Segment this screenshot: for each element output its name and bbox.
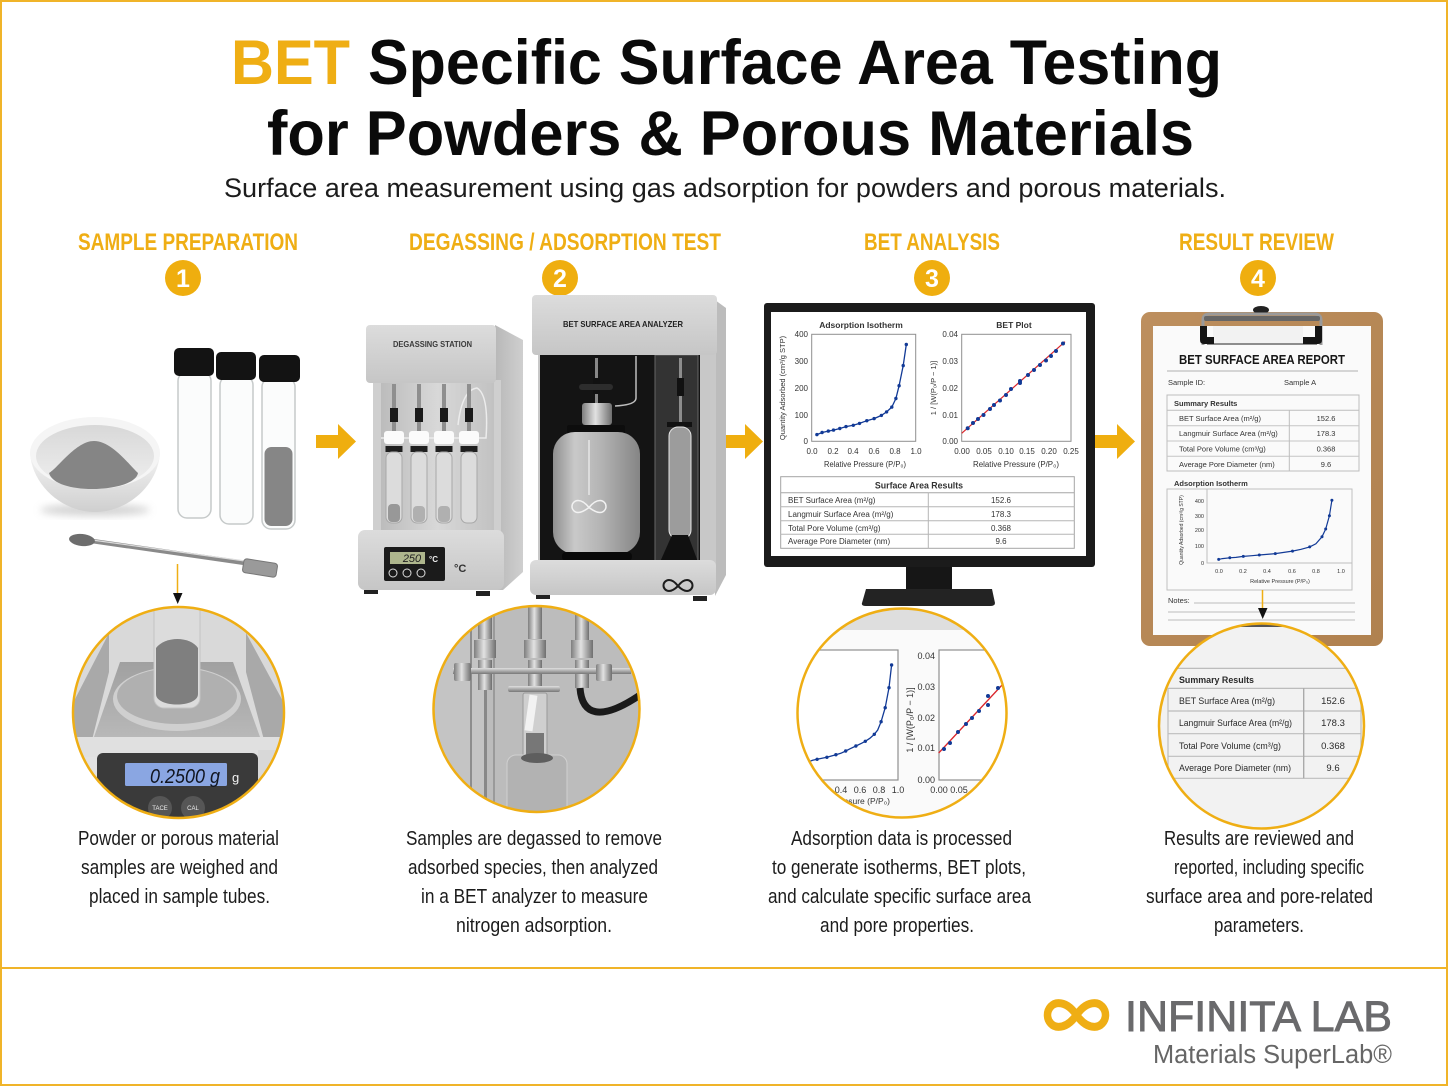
chart: bet plot: BET Plot <box>996 320 1032 330</box>
description step 3: and pore properties. <box>820 915 974 937</box>
chart: bet plot: 0.03 <box>942 357 959 366</box>
summary results table: 0.368 <box>1317 444 1335 454</box>
close-up: balance weighing: 0.2500 g <box>150 766 220 788</box>
title: for Powders & Porous Materials <box>267 99 1194 169</box>
chart: adsorption isotherm <box>778 320 922 469</box>
summary results table <box>1167 395 1359 471</box>
heading: result review: RESULT REVIEW <box>1179 229 1334 256</box>
subtitle: Surface area measurement using gas adsorption for powders and porous materials. <box>224 173 1226 203</box>
title: BET <box>231 28 350 98</box>
panel: step 3 bet analysis <box>764 229 1095 937</box>
chart: bet plot: 0.25 <box>1063 447 1079 456</box>
close-up: summary results: 178.3 <box>1321 718 1345 729</box>
title: Specific Surface Area Testing <box>368 28 1222 98</box>
close-up: summary results: Average Pore Diameter (nm) <box>1179 763 1291 774</box>
table: surface area results: 9.6 <box>995 537 1007 546</box>
chart: bet plot: Relative Pressure (P/P₀) <box>973 460 1059 469</box>
summary results table: 152.6 <box>1317 414 1335 423</box>
heading: sample preparation: SAMPLE PREPARATION <box>78 229 298 256</box>
clipboard report: Sample ID: <box>1168 378 1205 387</box>
close-up: plots detail: 0.4 <box>835 785 847 795</box>
heading: bet analysis: BET ANALYSIS <box>864 229 1000 256</box>
summary results table: Summary Results <box>1174 399 1237 408</box>
summary results table: Langmuir Surface Area (m²/g) <box>1179 429 1278 438</box>
chart: adsorption isotherm: 0.6 <box>868 447 880 456</box>
chart: bet plot <box>929 320 1079 469</box>
close-up: plots detail: 0.00 <box>930 785 948 795</box>
chart: adsorption isotherm: Relative Pressure (P/P₀) <box>824 460 906 469</box>
monitor <box>764 303 1095 606</box>
arrow to report close-up <box>1258 590 1268 619</box>
description step 4: surface area and pore-related <box>1146 886 1373 908</box>
close-up: plots detail: 0.04 <box>917 651 935 661</box>
step number 2 <box>542 260 578 296</box>
icon: infinity <box>1048 1003 1106 1027</box>
clipboard report <box>1141 306 1383 646</box>
table: surface area results: 0.368 <box>991 524 1012 533</box>
chart: bet plot: 0.04 <box>942 330 959 339</box>
close-up: plots detail: 0.01 <box>917 743 935 753</box>
table: surface area results: BET Surface Area (m²/g) <box>788 496 876 505</box>
description step 3: to generate isotherms, BET plots, <box>772 857 1026 879</box>
report isotherm chart: Adsorption Isotherm <box>1174 479 1248 488</box>
description step 4: Results are reviewed and <box>1164 828 1354 850</box>
description step 3 <box>768 828 1032 937</box>
report isotherm chart: 1.0 <box>1337 569 1345 575</box>
close-up: plots detail: 0.03 <box>917 682 935 692</box>
icon: sample tubes <box>174 348 300 529</box>
sample cell <box>660 358 698 562</box>
close-up: summary results: 0.368 <box>1321 741 1345 752</box>
report isotherm chart: 300 <box>1195 514 1204 520</box>
table: surface area results: Total Pore Volume (cm³/g) <box>788 524 881 533</box>
report isotherm chart: 100 <box>1195 544 1204 550</box>
panel: step 4 result review <box>1141 229 1383 937</box>
chart: adsorption isotherm: 0 <box>804 437 809 446</box>
description step 3: and calculate specific surface area <box>768 886 1032 908</box>
description step 4 <box>1146 828 1373 937</box>
summary results table: BET Surface Area (m²/g) <box>1179 414 1261 423</box>
bet analyzer instrument <box>530 295 726 601</box>
wordmark: INFINITA LAB <box>1125 993 1392 1041</box>
notes lines: Notes: <box>1168 596 1190 605</box>
panel: step 1 sample preparation <box>30 229 300 908</box>
chart: adsorption isotherm: 0.0 <box>806 447 818 456</box>
table: surface area results: Average Pore Diameter (nm) <box>788 537 890 546</box>
chart: adsorption isotherm: Quantity Adsorbed (cm³/g STP) <box>778 335 787 440</box>
degassing station instrument <box>358 325 523 596</box>
clipboard report: BET SURFACE AREA REPORT <box>1179 352 1345 367</box>
close-up: plots detail: 1.0 <box>892 785 904 795</box>
close-up: balance weighing: TACE <box>152 806 168 812</box>
report isotherm chart: 0.2 <box>1239 569 1247 575</box>
step number 4 <box>1240 260 1276 296</box>
close-up: summary results: Total Pore Volume (cm³/g) <box>1179 741 1281 752</box>
close-up: summary results <box>1159 622 1368 828</box>
temperature display: °C <box>429 555 438 564</box>
chart: adsorption isotherm: 300 <box>795 357 809 366</box>
close-up: summary results: 152.6 <box>1321 696 1345 707</box>
report isotherm chart: 200 <box>1195 528 1204 534</box>
chart: adsorption isotherm: 100 <box>795 411 809 420</box>
clipboard report: Sample A <box>1284 378 1316 387</box>
bet analyzer instrument: BET SURFACE AREA ANALYZER <box>563 319 683 329</box>
chart: adsorption isotherm: 400 <box>795 330 809 339</box>
step number 3: 3 <box>925 265 939 293</box>
close-up: valve manifold <box>430 600 640 820</box>
table: surface area results <box>781 477 1074 548</box>
chart: bet plot: 0.15 <box>1019 447 1035 456</box>
temperature display: °C <box>454 563 466 575</box>
chart: adsorption isotherm: 200 <box>795 384 809 393</box>
close-up: balance weighing: g <box>232 770 239 785</box>
arrow 3 to 4 <box>1095 424 1135 459</box>
close-up: summary results: 9.6 <box>1326 763 1340 774</box>
description step 3: Adsorption data is processed <box>791 828 1012 850</box>
description step 2: nitrogen adsorption. <box>456 915 612 937</box>
report isotherm chart <box>1167 479 1352 590</box>
heading: degassing adsorption test: DEGASSING / ADSORPTION TEST <box>409 229 721 256</box>
report isotherm chart: 0.4 <box>1263 569 1271 575</box>
title <box>231 28 1222 169</box>
close-up: plots detail: 0.00 <box>917 775 935 785</box>
description step 2: in a BET analyzer to measure <box>421 886 648 908</box>
gas vessel <box>553 356 640 561</box>
arrow to balance close-up <box>173 564 182 604</box>
table: surface area results: 178.3 <box>991 510 1012 519</box>
description step 2: Samples are degassed to remove <box>406 828 662 850</box>
chart: bet plot: 0.00 <box>942 437 959 446</box>
tagline: Materials SuperLab® <box>1153 1041 1392 1069</box>
description step 4: reported, including specific <box>1174 857 1364 879</box>
close-up: plots detail: 0.6 <box>854 785 866 795</box>
chart: bet plot: 0.02 <box>942 384 959 393</box>
logo: infinita lab <box>1048 993 1392 1069</box>
close-up: plots detail: Pressure (P/P₀) <box>831 796 890 806</box>
chart: adsorption isotherm: Adsorption Isotherm <box>819 320 903 330</box>
chart: bet plot: 0.00 <box>954 447 970 456</box>
step number 2: 2 <box>553 265 567 293</box>
close-up: plots detail: 0.8 <box>873 785 885 795</box>
panel: step 2 degassing adsorption test <box>358 229 726 937</box>
clip <box>1200 306 1322 345</box>
summary results table: Total Pore Volume (cm³/g) <box>1179 444 1266 454</box>
summary results table: 178.3 <box>1317 429 1335 438</box>
description step 2: adsorbed species, then analyzed <box>408 857 658 879</box>
close-up: summary results: Summary Results <box>1179 675 1254 686</box>
description step 1: Powder or porous material <box>78 828 279 850</box>
description step 2 <box>406 828 662 937</box>
description step 1: placed in sample tubes. <box>89 886 270 908</box>
summary results table: Average Pore Diameter (nm) <box>1179 460 1275 469</box>
chart: adsorption isotherm: 0.8 <box>889 447 901 456</box>
close-up: plots detail <box>796 607 1008 819</box>
temperature display <box>384 547 466 581</box>
report isotherm chart: 0.0 <box>1215 569 1223 575</box>
report isotherm chart: Relative Pressure (P/P₀) <box>1250 579 1310 585</box>
temperature display: 250 <box>402 553 422 565</box>
report isotherm chart: Quantity Adsorbed (cm³/g STP) <box>1179 495 1185 565</box>
close-up: summary results: BET Surface Area (m²/g) <box>1179 696 1275 707</box>
chart: bet plot: 0.01 <box>942 411 959 420</box>
degassing station instrument: DEGASSING STATION <box>393 339 472 349</box>
arrow 1 to 2 <box>316 424 356 459</box>
description step 1 <box>78 828 279 908</box>
chart: adsorption isotherm: 1.0 <box>910 447 922 456</box>
table: surface area results: Surface Area Results <box>875 480 963 490</box>
step number 3 <box>914 260 950 296</box>
description step 1: samples are weighed and <box>81 857 278 879</box>
chart: bet plot: 0.20 <box>1041 447 1057 456</box>
close-up: plots detail: 0.05 <box>950 785 968 795</box>
close-up: summary results: Langmuir Surface Area (m²/g) <box>1179 718 1292 729</box>
report isotherm chart: 400 <box>1195 499 1204 505</box>
chart: adsorption isotherm: 0.4 <box>847 447 859 456</box>
close-up: balance weighing <box>72 606 286 820</box>
step number 1: 1 <box>176 265 190 293</box>
chart: adsorption isotherm: 0.2 <box>827 447 839 456</box>
report isotherm chart: 0.8 <box>1312 569 1320 575</box>
sample ports <box>381 384 487 523</box>
table: surface area results: Langmuir Surface Area (m²/g) <box>788 510 894 519</box>
arrow 2 to 3 <box>726 424 763 459</box>
step number 1 <box>165 260 201 296</box>
close-up: balance weighing: CAL <box>187 806 199 812</box>
close-up: plots detail: 1 / [W(P₀/P − 1)] <box>905 687 915 753</box>
chart: bet plot: 1 / [W(P₀/P − 1)] <box>929 361 938 415</box>
report isotherm chart: 0.6 <box>1288 569 1296 575</box>
chart: bet plot: 0.10 <box>998 447 1014 456</box>
footer divider <box>1 967 1447 969</box>
chart: bet plot: 0.05 <box>976 447 992 456</box>
table: surface area results: 152.6 <box>991 496 1012 505</box>
summary results table: 9.6 <box>1321 460 1331 469</box>
icon: bowl of powder <box>30 417 160 516</box>
description step 4: parameters. <box>1214 915 1304 937</box>
icon: spatula <box>68 533 278 578</box>
report isotherm chart: 0 <box>1201 561 1204 567</box>
step number 4: 4 <box>1251 265 1265 293</box>
close-up: plots detail: 0.02 <box>917 713 935 723</box>
